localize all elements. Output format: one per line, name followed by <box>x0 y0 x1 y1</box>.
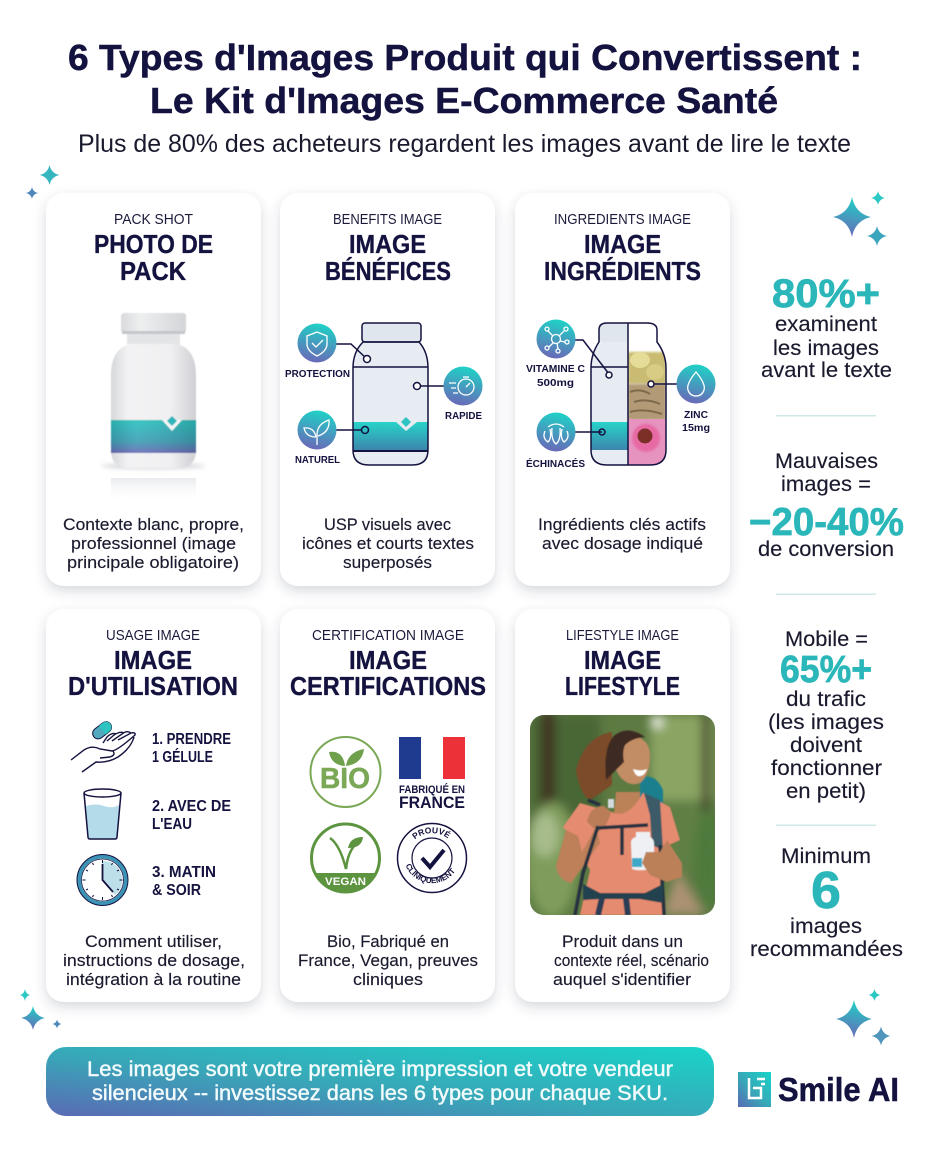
description <box>63 932 245 989</box>
heading: usage: USAGE IMAGE <box>106 627 200 644</box>
heading: lifestyle <box>565 627 680 701</box>
description: principale obligatoire) <box>67 553 239 572</box>
label: vitamine C: VITAMINE C <box>526 363 585 375</box>
stat: -20-40%: −20-40% <box>749 501 904 544</box>
badge: vegan: VEGAN <box>325 876 366 888</box>
label: zinc <box>682 409 710 434</box>
description: auquel s'identifier <box>553 970 691 989</box>
stat: 65%+: en petit) <box>786 780 866 803</box>
annotated bottle diagram <box>336 323 445 465</box>
badge: bio <box>310 737 380 807</box>
description: professionnel (image <box>71 534 236 553</box>
badge: bio: BIO <box>320 763 370 795</box>
stat: 80%+: 80%+ <box>772 272 880 316</box>
heading: certifications <box>290 627 486 701</box>
stat: 65%+ <box>768 628 884 803</box>
step 3: 3. MATIN <box>152 864 216 881</box>
stat: 80%+ <box>761 272 892 382</box>
heading: certifications: CERTIFICATIONS <box>290 671 486 701</box>
callout banner: Les images sont votre première impression et votre vendeur <box>87 1058 673 1081</box>
heading: ingredients: IMAGE <box>584 229 661 259</box>
heading: certifications: CERTIFICATION IMAGE <box>312 627 464 644</box>
heading: ingredients <box>544 211 701 286</box>
label: rapide: RAPIDE <box>445 410 482 422</box>
stat: -20-40%: images = <box>781 473 871 496</box>
title <box>68 37 862 121</box>
stat: minimum 6: 6 <box>811 862 841 920</box>
description: France, Vegan, preuves <box>298 951 478 970</box>
panel: lifestyle <box>515 609 730 1002</box>
heading: usage: D'UTILISATION <box>68 671 238 701</box>
step 2 <box>152 798 231 833</box>
heading: pack shot: PACK SHOT <box>114 211 193 228</box>
description: Bio, Fabriqué en <box>327 932 449 951</box>
heading: benefits: IMAGE <box>349 229 426 259</box>
stat: 65%+: (les images <box>768 711 884 734</box>
label: vitamine C: 500mg <box>537 377 574 389</box>
description <box>302 515 474 572</box>
stat: 65%+: doivent <box>790 734 862 757</box>
callout banner: silencieux -- investissez dans les 6 types pour chaque SKU. <box>92 1082 668 1105</box>
label: naturel: NATUREL <box>295 454 341 466</box>
label: vitamine C <box>526 363 585 389</box>
heading: lifestyle: LIFESTYLE <box>565 671 680 701</box>
heading: benefits: BÉNÉFICES <box>325 256 451 286</box>
stat: 65%+: 65%+ <box>780 649 872 691</box>
stat: 80%+: avant le texte <box>761 359 892 382</box>
stat: 80%+: les images <box>773 337 879 360</box>
description: Contexte blanc, propre, <box>63 515 244 534</box>
heading: lifestyle: IMAGE <box>584 645 661 675</box>
description: Comment utiliser, <box>85 932 222 951</box>
heading: usage: IMAGE <box>114 645 192 675</box>
heading: ingredients: INGRÉDIENTS <box>544 256 701 286</box>
product bottle photo <box>101 313 205 502</box>
panel: ingredients <box>515 193 730 586</box>
icon: clock <box>77 854 128 906</box>
step 1: 1 GÉLULE <box>152 747 213 766</box>
heading: pack shot: PHOTO DE <box>94 229 213 259</box>
panel: certifications <box>274 608 500 1012</box>
subtitle: Plus de 80% des acheteurs regardent les images avant de lire le texte <box>78 130 851 158</box>
step 2: L'EAU <box>152 816 192 833</box>
description: instructions de dosage, <box>63 951 245 970</box>
description: contexte réel, scénario <box>554 951 709 970</box>
description <box>63 515 244 572</box>
heading: lifestyle: LIFESTYLE IMAGE <box>566 627 679 644</box>
stat: minimum 6: images <box>790 915 862 938</box>
stat: 65%+: du trafic <box>786 688 866 711</box>
description: avec dosage indiqué <box>542 534 703 553</box>
stat: -20-40%: de conversion <box>758 538 894 561</box>
icon: echinacea flower <box>536 412 576 452</box>
step 3: & SOIR <box>152 882 201 899</box>
description: cliniques <box>353 970 423 989</box>
badge: fabriqué en France: FABRIQUÉ EN <box>399 783 465 796</box>
hiker <box>556 730 682 915</box>
icon: zinc drop <box>676 364 716 404</box>
stat: 65%+: Mobile = <box>785 628 868 651</box>
heading: benefits: BENEFITS IMAGE <box>333 211 442 228</box>
stat: -20-40% <box>749 450 904 561</box>
description: USP visuels avec <box>324 515 451 534</box>
badge: vegan <box>312 824 380 892</box>
heading: ingredients: INGREDIENTS IMAGE <box>554 211 691 228</box>
stat: minimum 6: recommandées <box>750 938 903 961</box>
title: Le Kit d'Images E-Commerce Santé <box>150 80 778 121</box>
decorative sparkles top left <box>26 165 60 199</box>
icon: protection shield <box>298 324 336 362</box>
title: 6 Types d'Images Produit qui Convertissent : <box>68 37 862 78</box>
decorative sparkles bottom right <box>836 989 890 1046</box>
heading: benefits <box>325 211 451 286</box>
stat: 65%+: fonctionner <box>771 757 882 780</box>
stat: -20-40%: Mauvaises <box>775 450 878 473</box>
decorative sparkles bottom left <box>20 989 62 1030</box>
description: superposés <box>343 553 432 572</box>
step 2: 2. AVEC DE <box>152 798 231 815</box>
stat: minimum 6 <box>750 845 903 961</box>
icon: naturel leaves <box>298 410 336 450</box>
icon: vitamin molecule <box>536 320 576 358</box>
badge: prouvé cliniquement: CLINIQUEMENT <box>406 864 454 884</box>
stat: 80%+: examinent <box>775 313 877 336</box>
decorative sparkles top right <box>833 191 887 246</box>
step 1 <box>152 731 231 766</box>
icon: rapide stopwatch <box>444 366 482 406</box>
icon: glass of water <box>84 789 121 839</box>
cutaway bottle diagram <box>575 323 677 465</box>
badge: fabriqué en France: FRANCE <box>399 793 465 812</box>
heading: pack shot: PACK <box>120 256 186 286</box>
lifestyle photo: hiker with bottle <box>526 712 722 918</box>
step 1: 1. PRENDRE <box>152 731 231 748</box>
description <box>298 932 478 989</box>
description: Ingrédients clés actifs <box>538 515 706 534</box>
label: zinc: 15mg <box>682 422 710 434</box>
badge: prouvé cliniquement: PROUVÉ <box>412 827 451 840</box>
callout banner <box>46 1047 714 1116</box>
badge: prouvé cliniquement <box>396 822 468 894</box>
icon: hand with capsule <box>71 719 135 772</box>
stat: minimum 6: Minimum <box>781 845 871 868</box>
description: Produit dans un <box>562 932 683 951</box>
description <box>538 515 706 553</box>
step 3 <box>152 864 216 899</box>
panel: pack shot <box>46 193 261 586</box>
heading: pack shot <box>94 211 213 286</box>
description: icônes et courts textes <box>302 534 474 553</box>
heading: certifications: IMAGE <box>349 645 427 675</box>
panel: benefits <box>280 193 495 586</box>
description <box>553 932 709 989</box>
logo: Smile AI: Smile AI <box>778 1071 899 1108</box>
heading: usage <box>68 627 238 701</box>
label: echinacea: ÉCHINACÉS <box>526 457 585 470</box>
panel: usage <box>46 609 261 1002</box>
description: intégration à la routine <box>66 970 241 989</box>
label: zinc: ZINC <box>684 409 708 421</box>
badge: fabriqué en France <box>399 737 465 812</box>
label: protection: PROTECTION <box>285 368 350 380</box>
